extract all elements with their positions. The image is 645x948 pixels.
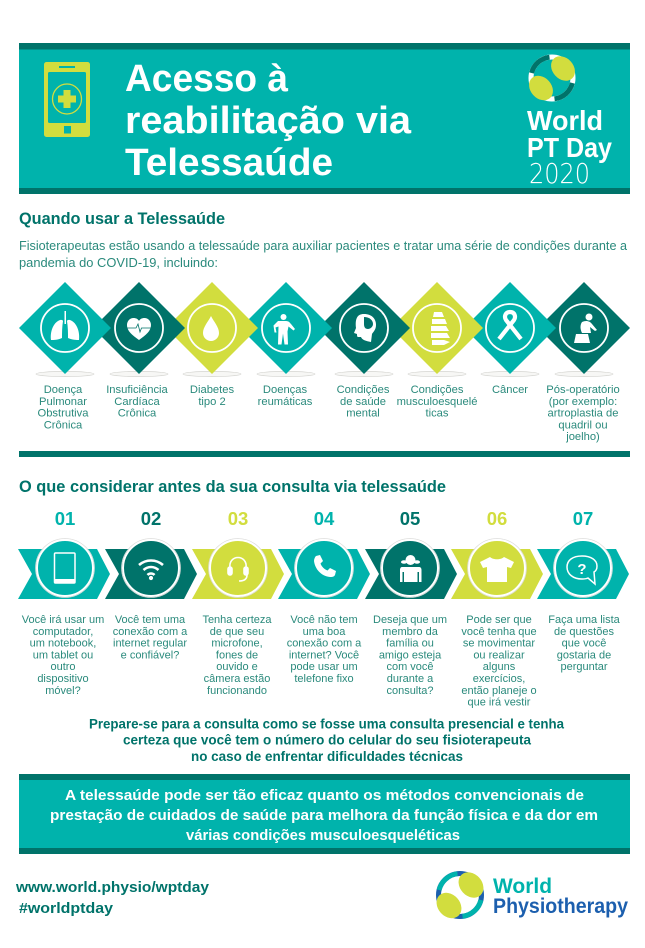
section divider: [19, 451, 630, 457]
step 04: pode usar um: [290, 661, 358, 673]
condition: diabetes: tipo 2: [198, 396, 226, 408]
title: Telessaúde: [125, 142, 333, 184]
step 07: de questões: [554, 626, 614, 638]
condition: rheumatic diseases: Doenças: [263, 384, 307, 396]
step 03: funcionando: [207, 685, 267, 697]
step 06: exercícios,: [473, 673, 525, 685]
intro paragraph: Fisioterapeutas estão usando a telessaúde para auxiliar pacientes e tratar uma série de condições durante a: [19, 238, 628, 253]
condition: COPD: Obstrutiva: [38, 408, 89, 420]
preparation note: certeza que você tem o número do celular do seu fisioterapeuta: [123, 732, 531, 748]
step 02: e confiável?: [121, 649, 179, 661]
step 04: uma boa: [303, 626, 346, 638]
callout banner: [19, 774, 630, 854]
icon: stooped person: [274, 314, 295, 344]
title: Acesso à: [125, 58, 289, 100]
step 03: Tenha certeza: [202, 614, 272, 626]
step 02: Você tem uma: [115, 614, 186, 626]
condition: musculoskeletal: [391, 282, 483, 420]
icon: speech bubble with question: ?: [577, 561, 587, 578]
logo: World Physiotherapy: World: [493, 875, 552, 898]
condition: musculoskeletal: ticas: [425, 408, 449, 420]
step 04: conexão com a: [287, 638, 362, 650]
condition: post-operative: quadril ou: [558, 419, 608, 431]
condition: mental health: mental: [346, 408, 380, 420]
step 07: 07: [573, 508, 593, 529]
step 02: 02: [141, 508, 161, 529]
title: reabilitação via: [125, 100, 412, 142]
condition: heart failure: [93, 282, 185, 420]
step 06: 06: [487, 508, 507, 529]
icon: speech bubble with question: [567, 556, 597, 584]
condition: COPD: Crônica: [44, 419, 83, 431]
logo: World Physiotherapy: [431, 867, 628, 923]
condition: post-operative: Pós-operatório: [546, 384, 620, 396]
icon: spine: [431, 312, 450, 345]
step 02: conexão com a: [113, 626, 188, 638]
condition: post-operative: artroplastia de: [548, 408, 618, 420]
icon: lungs: [51, 311, 79, 340]
step 06: [451, 508, 543, 709]
callout banner: várias condições musculoesqueléticas: [186, 828, 460, 844]
condition: diabetes: [166, 282, 258, 408]
condition: mental health: de saúde: [340, 396, 386, 408]
icon: phone with medical cross: [44, 62, 90, 137]
icon: ribbon: [499, 312, 521, 339]
step 01: outro: [50, 661, 76, 673]
intro paragraph: pandemia do COVID-19, incluindo:: [19, 255, 218, 270]
step 05: membro da: [382, 626, 439, 638]
step 05: Deseja que um: [373, 614, 447, 626]
step 07: gostaria de: [557, 649, 611, 661]
step 01: móvel?: [45, 685, 81, 697]
logo: World PT Day 2020: [524, 51, 612, 190]
step 05: durante a: [387, 673, 434, 685]
step 04: 04: [314, 508, 335, 529]
step 07: perguntar: [560, 661, 608, 673]
step 05: família ou: [386, 638, 434, 650]
step 05: amigo esteja: [379, 649, 442, 661]
step 02: [105, 508, 197, 661]
step 07: [537, 508, 629, 673]
icon: telephone: [314, 555, 336, 577]
icon: wifi: [139, 560, 163, 579]
footer links: #worldptday: [19, 900, 114, 917]
condition: post-operative: joelho): [565, 431, 600, 443]
step 05: 05: [400, 508, 420, 529]
logo: World PT Day 2020: 2020: [529, 157, 590, 190]
icon: head with brain: [354, 314, 376, 342]
step 03: de que seu: [210, 626, 264, 638]
heading: O que considerar: O que considerar antes da sua consulta via telessaúde: [19, 478, 446, 496]
step 04: [278, 508, 370, 685]
step 05: consulta?: [386, 685, 434, 697]
step 06: alguns: [483, 661, 516, 673]
condition: diabetes: Diabetes: [190, 384, 234, 396]
condition: post-operative: [538, 282, 630, 443]
step 01: computador,: [33, 626, 93, 638]
step 01: um notebook,: [30, 638, 96, 650]
step 04: internet? Você: [289, 649, 359, 661]
condition: rheumatic diseases: [240, 282, 332, 408]
icon: seated person: [574, 314, 597, 343]
step 04: telefone fixo: [294, 673, 354, 685]
step 01: Você irá usar um: [22, 614, 104, 626]
step 02: internet regular: [113, 638, 187, 650]
condition: COPD: [19, 282, 111, 431]
condition: musculoskeletal: musculoesquelé: [397, 396, 477, 408]
condition: cancer: [464, 282, 556, 396]
condition: musculoskeletal: Condições: [411, 384, 464, 396]
logo: World PT Day 2020: PT Day: [527, 132, 612, 163]
header banner: [19, 43, 630, 194]
callout banner: A telessaúde pode ser tão eficaz quanto os métodos convencionais de: [65, 788, 584, 804]
condition: COPD: Doença: [44, 384, 83, 396]
step 05: com você: [386, 661, 434, 673]
condition: mental health: [318, 282, 410, 420]
preparation note: Prepare-se para a consulta como se fosse uma consulta presencial e tenha: [89, 716, 564, 732]
condition: post-operative: (por exemplo:: [549, 396, 617, 408]
condition: heart failure: Crônica: [118, 408, 157, 420]
callout banner: prestação de cuidados de saúde para melhora da função física e da dor em: [50, 808, 598, 824]
icon: drop: [203, 316, 219, 341]
step 01: dispositivo: [37, 673, 89, 685]
step 03: câmera estão: [204, 673, 270, 685]
logo: World PT Day 2020: World: [527, 105, 603, 136]
step 06: Pode ser que: [466, 614, 532, 626]
step 07: Faça uma lista: [548, 614, 621, 626]
step 03: 03: [228, 508, 248, 529]
step 06: que irá vestir: [468, 697, 531, 709]
icon: headset: [228, 558, 248, 581]
condition: cancer: Câncer: [492, 384, 528, 396]
step 01: um tablet ou: [33, 649, 93, 661]
step 05: [365, 508, 457, 697]
heading: Quando usar a Telessaúde: Quando usar a Telessaúde: [19, 210, 225, 228]
step 03: fones de: [216, 649, 258, 661]
step 04: Você não tem: [290, 614, 358, 626]
condition: heart failure: Insuficiência: [106, 384, 169, 396]
step 03: [192, 508, 284, 697]
preparation note: no caso de enfrentar dificuldades técnicas: [191, 749, 463, 764]
step 03: microfone,: [211, 638, 263, 650]
step 06: você tenha que: [461, 626, 537, 638]
icon: tablet: [54, 553, 75, 583]
condition: heart failure: Cardíaca: [114, 396, 160, 408]
step 06: ou realizar: [473, 649, 525, 661]
condition: COPD: Pulmonar: [39, 396, 87, 408]
step 06: então planeje o: [461, 685, 537, 697]
panel: conditions: [19, 282, 630, 443]
logo: World Physiotherapy: Physiotherapy: [493, 895, 628, 918]
panel: steps: [18, 508, 629, 709]
step 03: ouvido e: [216, 661, 258, 673]
step 01: [18, 508, 110, 697]
condition: mental health: Condições: [337, 384, 390, 396]
footer links: www.world.physio/wptday: [15, 879, 210, 896]
icon: family member: [400, 555, 422, 582]
condition: rheumatic diseases: reumáticas: [258, 396, 313, 408]
step 06: se movimentar: [463, 638, 535, 650]
step 01: 01: [55, 508, 75, 529]
step 07: que você: [562, 638, 606, 650]
icon: t-shirt: [480, 557, 514, 582]
icon: heart with pulse: [127, 318, 152, 340]
